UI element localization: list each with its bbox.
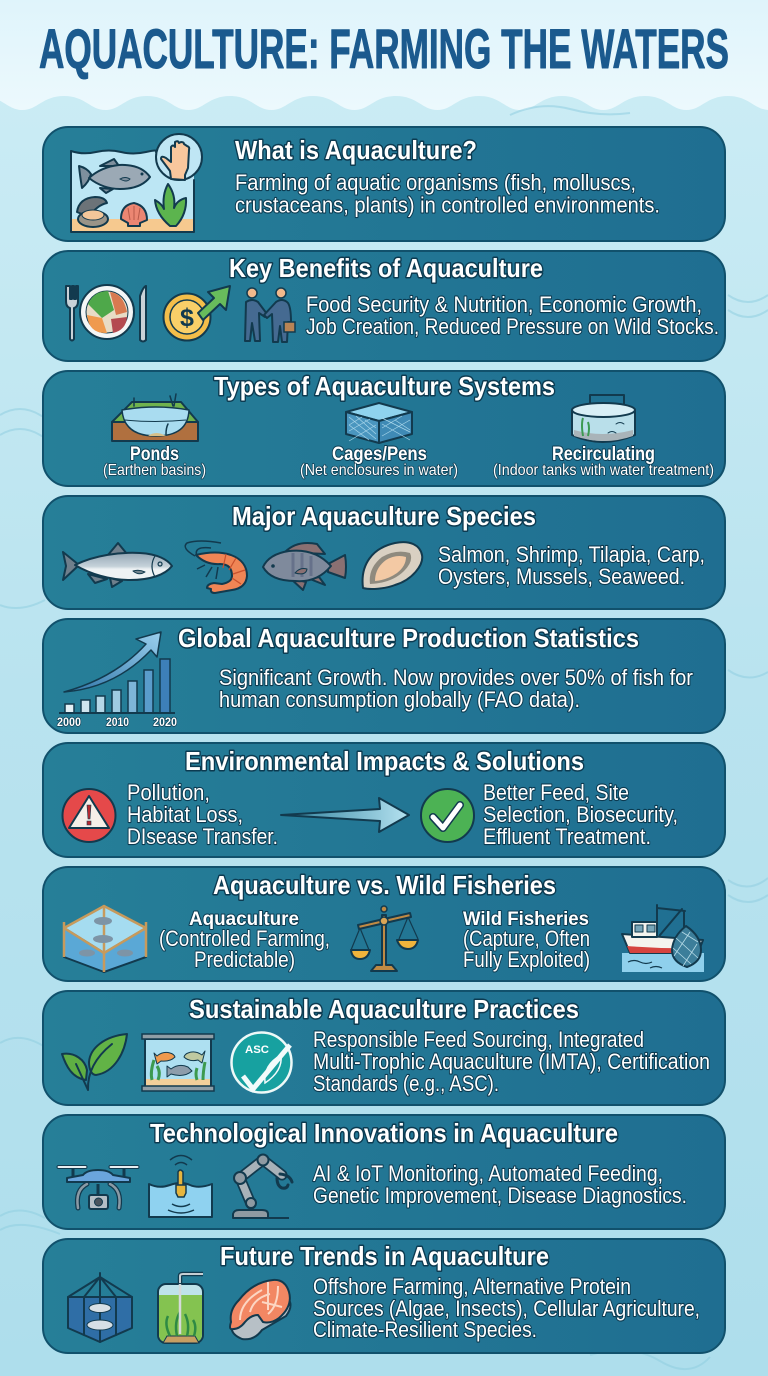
heading: Global Aquaculture Production Statistics bbox=[178, 623, 639, 653]
text: solutions: Better Feed, Site bbox=[483, 780, 629, 805]
body text bbox=[438, 542, 705, 589]
labels: Cages/Pens bbox=[332, 444, 427, 465]
body text: Responsible Feed Sourcing, Integrated bbox=[313, 1027, 644, 1052]
labels: (Indoor tanks with water treatment) bbox=[493, 462, 714, 479]
heading: Sustainable Aquaculture Practices bbox=[189, 994, 579, 1024]
bar chart bbox=[57, 632, 177, 729]
labels: Recirculating bbox=[552, 444, 655, 465]
icon: ASC certification badge: ASC bbox=[245, 1044, 269, 1056]
bar chart: 2020 bbox=[153, 715, 177, 729]
heading: Environmental Impacts & Solutions bbox=[185, 746, 584, 776]
panel: technological innovations bbox=[43, 1115, 725, 1229]
text: aquaculture bbox=[159, 909, 330, 972]
body text: Climate-Resilient Species. bbox=[313, 1317, 537, 1342]
text: solutions: Selection, Biosecurity, bbox=[483, 802, 678, 827]
body text: Multi-Trophic Aquaculture (IMTA), Certification bbox=[313, 1049, 710, 1074]
text: impacts: DIsease Transfer. bbox=[127, 824, 278, 849]
icon: warning bbox=[62, 789, 116, 842]
body text: Farming of aquatic organisms (fish, molluscs, bbox=[235, 170, 636, 195]
text: wild fisheries: Fully Exploited) bbox=[463, 947, 590, 972]
text: solutions bbox=[483, 780, 678, 849]
arrow bbox=[281, 798, 409, 832]
body text: Sources (Algae, Insects), Cellular Agriculture, bbox=[313, 1296, 700, 1321]
body text: Standards (e.g., ASC). bbox=[313, 1071, 499, 1096]
icon: oyster bbox=[363, 542, 422, 589]
text: impacts bbox=[127, 780, 278, 849]
heading: Technological Innovations in Aquaculture bbox=[150, 1118, 618, 1148]
icon: plate and cutlery bbox=[66, 285, 146, 342]
labels: (Earthen basins) bbox=[103, 462, 206, 479]
icon: tank bbox=[572, 395, 635, 442]
text: impacts: Pollution, bbox=[127, 780, 210, 805]
heading: Types of Aquaculture Systems bbox=[214, 371, 555, 401]
body text bbox=[313, 1161, 687, 1208]
text: aquaculture: (Controlled Farming, bbox=[159, 926, 330, 951]
body text: crustaceans, plants) in controlled environments. bbox=[235, 192, 660, 218]
panel: what is aquaculture bbox=[43, 127, 725, 241]
icon: aquarium bbox=[142, 1034, 214, 1091]
body text bbox=[306, 292, 719, 339]
body text bbox=[235, 170, 660, 218]
heading: Aquaculture vs. Wild Fisheries bbox=[213, 870, 556, 900]
body text bbox=[313, 1274, 700, 1342]
body text: Food Security & Nutrition, Economic Growth, bbox=[306, 292, 702, 317]
labels: Ponds bbox=[130, 444, 179, 465]
text: aquaculture: Predictable) bbox=[194, 947, 295, 972]
heading: What is Aquaculture? bbox=[235, 135, 477, 165]
icon: scales bbox=[351, 906, 418, 971]
text: solutions: Effluent Treatment. bbox=[483, 824, 651, 849]
icon: robotic arm bbox=[233, 1154, 292, 1218]
heading: Future Trends in Aquaculture bbox=[220, 1241, 549, 1271]
text: wild fisheries: Wild Fisheries bbox=[463, 909, 589, 930]
icon: bioreactor jar bbox=[158, 1274, 203, 1343]
icon: drone bbox=[57, 1166, 139, 1209]
body text: human consumption globally (FAO data). bbox=[219, 687, 580, 712]
icon: cage bbox=[346, 403, 412, 443]
body text: Oysters, Mussels, Seaweed. bbox=[438, 564, 685, 589]
panel: types of systems bbox=[43, 371, 725, 486]
icon: tilapia bbox=[263, 543, 346, 590]
icon: fishing boat bbox=[622, 905, 704, 972]
icon: water sensor bbox=[149, 1156, 212, 1217]
icon: handshake bbox=[245, 288, 295, 342]
body text bbox=[313, 1027, 710, 1096]
panel: sustainable practices bbox=[43, 991, 725, 1105]
icon: aquatic scene bbox=[71, 134, 202, 232]
body text: AI & IoT Monitoring, Automated Feeding, bbox=[313, 1161, 663, 1186]
labels: (Net enclosures in water) bbox=[300, 462, 458, 479]
panel: major species bbox=[43, 496, 725, 609]
panel: environmental impacts bbox=[43, 743, 725, 857]
heading: Key Benefits of Aquaculture bbox=[229, 253, 543, 283]
labels bbox=[103, 444, 714, 479]
icon: fish tank bbox=[64, 905, 146, 972]
body text: Offshore Farming, Alternative Protein bbox=[313, 1274, 631, 1299]
body text bbox=[219, 665, 693, 712]
panel: key benefits bbox=[43, 251, 725, 361]
icon: salmon bbox=[63, 543, 172, 587]
icon: coin and growth arrow bbox=[164, 286, 230, 340]
icon: ASC certification badge bbox=[232, 1032, 292, 1092]
icon: coin and growth arrow: $ bbox=[180, 304, 194, 332]
text: wild fisheries bbox=[463, 909, 590, 972]
text: impacts: Habitat Loss, bbox=[127, 802, 243, 827]
icon: offshore cage bbox=[68, 1273, 132, 1342]
icon: salmon steak bbox=[230, 1280, 290, 1339]
panel: future trends bbox=[43, 1239, 725, 1353]
body text: Significant Growth. Now provides over 50% of fish for bbox=[219, 665, 693, 690]
text: aquaculture: Aquaculture bbox=[189, 909, 299, 930]
icon: leaves bbox=[62, 1034, 127, 1090]
bar chart: 2010 bbox=[106, 715, 129, 729]
panel: production statistics bbox=[43, 619, 725, 733]
body text: Genetic Improvement, Disease Diagnostics. bbox=[313, 1183, 687, 1208]
icon: pond bbox=[112, 394, 198, 441]
body text: Salmon, Shrimp, Tilapia, Carp, bbox=[438, 542, 705, 567]
panel: aquaculture vs wild bbox=[43, 867, 725, 981]
icon: check bbox=[421, 789, 474, 842]
text: wild fisheries: (Capture, Often bbox=[463, 926, 590, 951]
heading: Major Aquaculture Species bbox=[232, 501, 536, 531]
icon: shrimp bbox=[185, 541, 247, 593]
bar chart: 2000 bbox=[57, 715, 81, 729]
